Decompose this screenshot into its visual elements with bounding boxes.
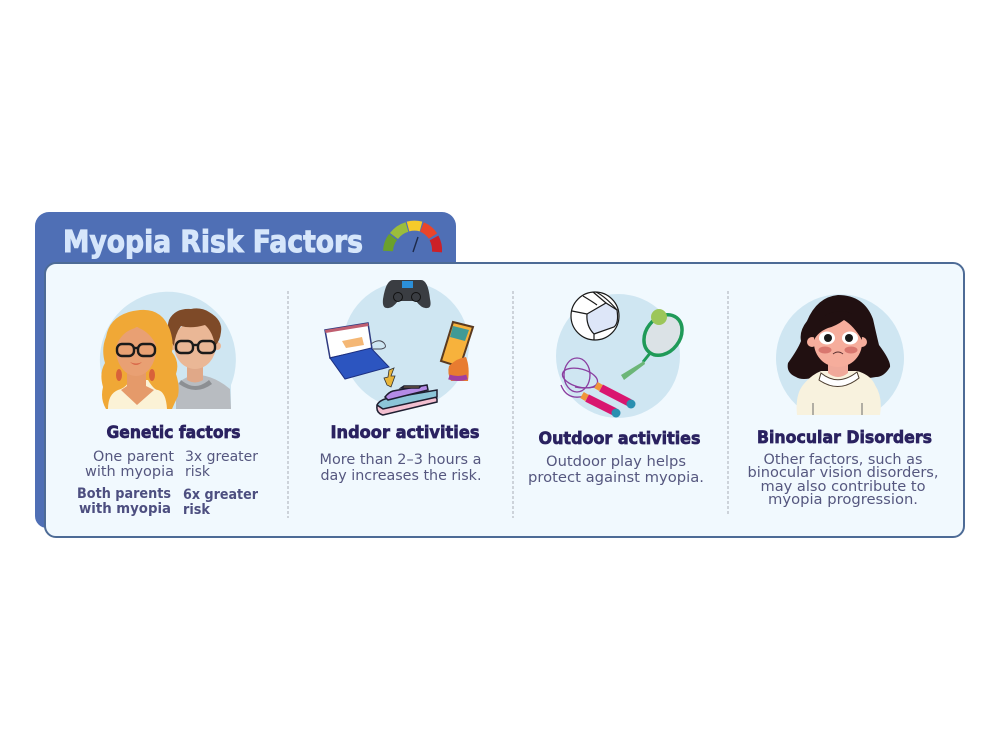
panel: binocular disorders: [748, 294, 938, 508]
indoor body text: day increases the risk.: [320, 468, 482, 484]
title: Myopia Risk Factors: [63, 225, 363, 260]
icon: girl portrait: [776, 294, 904, 415]
one parent row: One parent: [93, 449, 175, 465]
one parent row: risk: [185, 464, 211, 480]
main panel: [45, 263, 964, 537]
both parents row: with myopia: [79, 501, 171, 517]
indoor body text: More than 2–3 hours a: [320, 452, 482, 468]
icon: jump rope: [560, 358, 636, 418]
binocular body text: may also contribute to: [760, 479, 926, 495]
outdoor body text: protect against myopia.: [528, 470, 704, 486]
icon: parents with glasses: [100, 292, 236, 409]
both parents row: Both parents: [77, 486, 171, 502]
binocular body text: Other factors, such as: [764, 452, 922, 468]
panel: genetic factors: [77, 292, 258, 518]
icon: laptop: [325, 323, 389, 379]
panel: indoor activities: [320, 280, 482, 484]
indoor body text: [320, 452, 482, 484]
icon: game controller: [383, 280, 431, 308]
outdoor illustration circle: [556, 294, 680, 418]
heading: Outdoor activities: Outdoor activities: [538, 429, 700, 449]
one parent row: 3x greater: [185, 449, 258, 465]
icon: tennis racket: [621, 307, 690, 380]
icon: books: [377, 385, 437, 415]
both parents row: [77, 486, 258, 518]
heading: Indoor activities: Indoor activities: [330, 423, 480, 443]
icon: lightning: [384, 368, 395, 387]
binocular body text: [748, 452, 938, 508]
icon: risk gauge: [388, 226, 437, 252]
outdoor body text: [528, 454, 704, 486]
indoor illustration circle: [343, 282, 469, 408]
column dividers: [288, 291, 728, 518]
header tab: [35, 212, 456, 528]
binocular body text: myopia progression.: [768, 492, 918, 508]
binocular body text: binocular vision disorders,: [748, 465, 938, 481]
both parents row: 6x greater: [183, 487, 258, 503]
heading: Genetic factors: Genetic factors: [106, 423, 240, 443]
one parent row: [85, 449, 258, 480]
one parent row: with myopia: [85, 464, 174, 480]
both parents row: risk: [183, 502, 211, 518]
icon: volleyball: [571, 292, 619, 340]
heading: Binocular Disorders: Binocular Disorders: [757, 428, 932, 448]
icon: phone in hand: [441, 322, 473, 381]
outdoor body text: Outdoor play helps: [546, 454, 686, 470]
panel: outdoor activities: [528, 292, 704, 486]
